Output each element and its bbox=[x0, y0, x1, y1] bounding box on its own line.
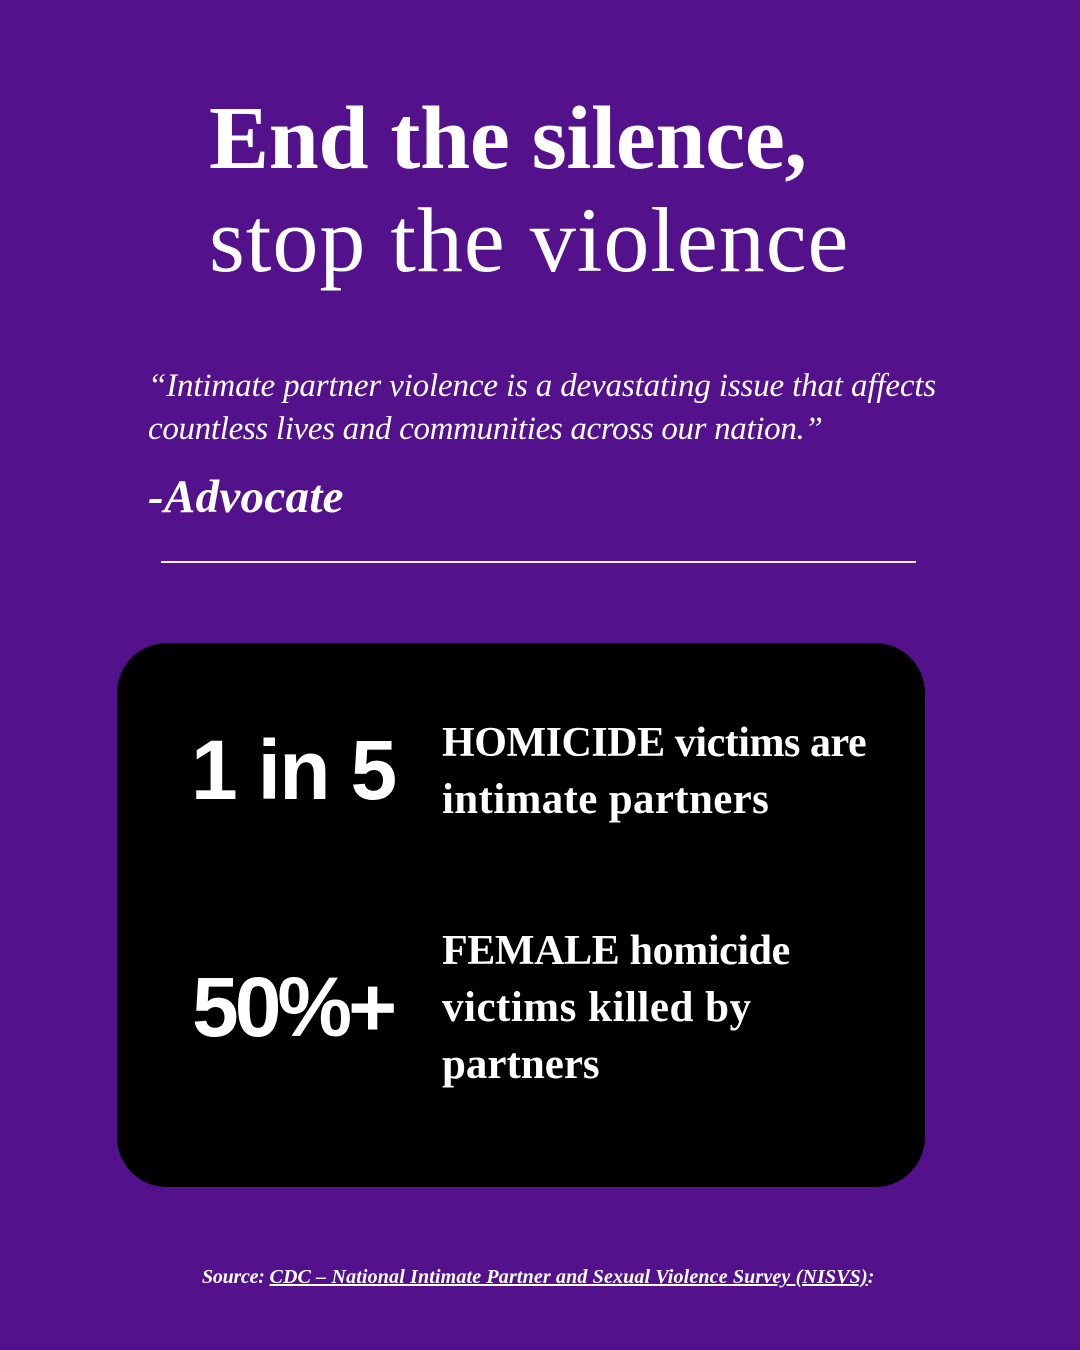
title: stop the violence bbox=[209, 189, 849, 291]
stat text: female homicide victims: partners bbox=[442, 1041, 600, 1088]
quote attribution: -Advocate bbox=[148, 471, 344, 523]
panel: statistics bbox=[117, 643, 925, 1187]
quote: “Intimate partner violence is a devastating issue that affects bbox=[148, 368, 936, 404]
stat: 50%+: 50%+ bbox=[192, 960, 393, 1054]
title: End the silence, bbox=[209, 89, 807, 188]
quote: countless lives and communities across our nation.” bbox=[148, 411, 823, 447]
quote bbox=[148, 368, 936, 447]
title bbox=[209, 89, 849, 291]
stat text: female homicide victims bbox=[442, 928, 790, 1088]
stat text: homicide victims: HOMICIDE victims are bbox=[442, 720, 866, 766]
stat text: female homicide victims: victims killed by bbox=[442, 984, 752, 1031]
stat text: female homicide victims: FEMALE homicide bbox=[442, 928, 790, 974]
stat: 1 in 5: 1 in 5 bbox=[191, 723, 396, 817]
stat text: homicide victims bbox=[442, 720, 866, 823]
stat text: homicide victims: intimate partners bbox=[442, 776, 769, 823]
source citation: Source: CDC – National Intimate Partner and Sexual Violence Survey (NISVS): bbox=[202, 1266, 874, 1288]
